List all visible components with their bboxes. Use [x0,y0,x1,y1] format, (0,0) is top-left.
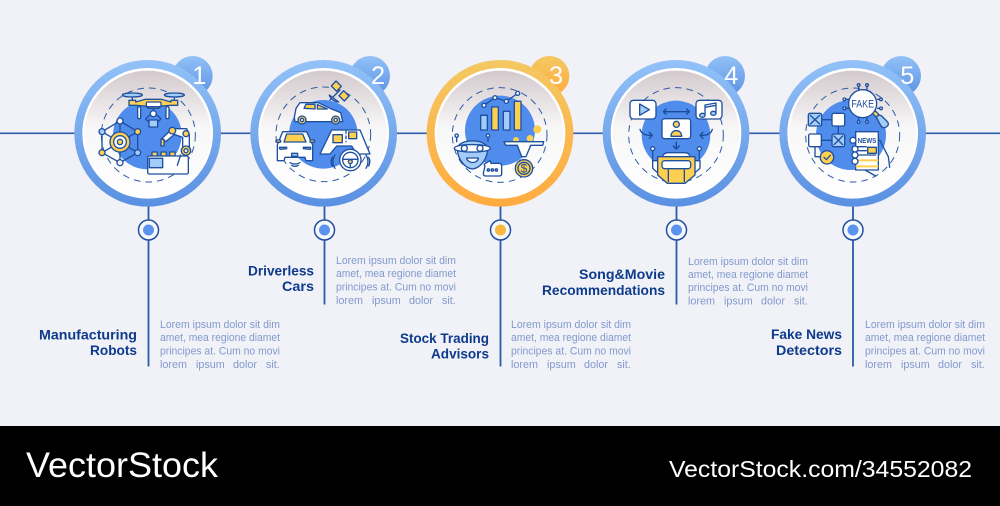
body text 1: ipsum [196,359,225,371]
heading: Fake News Detectors: Detectors [776,342,842,358]
heading: Stock Trading Advisors: Stock Trading [400,330,489,346]
body text 4: principes at. Cum no movi [688,282,808,294]
heading: Song&Movie Recommendations: Recommendations [542,282,665,298]
footer brand: VectorStock [26,446,219,485]
timeline axis [0,132,1000,134]
stem and node 5 [843,200,863,366]
body text 2: lorem [336,295,363,307]
step 4: Song & Movie Recommendations [542,56,808,307]
icon: user profile card [662,119,691,139]
heading: Manufacturing Robots: Manufacturing [39,326,137,342]
icon: music note [696,100,722,119]
body text 2: ipsum [372,295,401,307]
body text 3: ipsum [547,359,576,371]
step 2: Driverless Cars [248,56,456,307]
body text 1: Lorem ipsum dolor sit dim [160,319,280,331]
number 2: 2 [371,62,385,90]
body text 1: dolor [233,359,257,371]
heading: Fake News Detectors: Fake News [771,326,842,342]
heading: Manufacturing Robots: Robots [90,342,137,358]
icon: drone with gripper [122,93,184,127]
body text 1: principes at. Cum no movi [160,346,280,358]
body text 3: sit. [617,359,631,371]
body text 5: Lorem ipsum dolor sit dim [865,319,985,331]
step 5: Fake News Detectors [771,56,985,371]
body text 3: Lorem ipsum dolor sit dim [511,319,631,331]
icon: robot arm and conveyor [148,127,191,174]
icon: video player [630,100,656,119]
stem and node 4 [666,200,686,304]
body text 3: dolor [584,359,608,371]
body text 4: amet, mea regione diamet [688,269,808,281]
icon circle 3 [427,56,573,207]
icon: lane assist and steering wheel [320,130,370,171]
icon circle 2 [250,56,397,207]
icon: newspaper in hand [850,132,890,176]
icon: robot recommender [651,147,701,183]
body text 4: Lorem ipsum dolor sit dim [688,256,808,268]
body text 3: lorem [511,359,538,371]
number 3: 3 [549,62,563,90]
number 5: 5 [900,62,914,90]
text: FAKE: FAKE [851,99,874,111]
stem and node 1 [138,200,158,366]
footer image url: VectorStock.com/34552082 [669,456,972,482]
body text 1: amet, mea regione diamet [160,332,280,344]
text: NEWS: NEWS [858,138,877,145]
icon: bar chart with trend line [481,91,521,130]
footer bar [0,426,1000,506]
body text 2: Lorem ipsum dolor sit dim [336,255,456,267]
heading: Stock Trading Advisors: Advisors [431,346,489,362]
number 1: 1 [192,62,206,90]
icon: magnifier on FAKE [843,84,888,128]
body text 5: principes at. Cum no movi [865,346,985,358]
step 1: Manufacturing Robots [39,56,280,371]
body text 3: amet, mea regione diamet [511,332,631,344]
icon: front car [276,132,315,166]
text: dollar sign: $ [521,162,528,176]
body text 5: dolor [938,359,962,371]
body text 5: amet, mea regione diamet [865,332,985,344]
heading: Driverless Cars: Cars [282,278,314,294]
body text 4: dolor [761,296,785,308]
stem and node 2 [314,200,334,304]
body text 2: sit. [442,295,456,307]
icon: satellite [329,81,349,102]
heading: Song&Movie Recommendations: Song&Movie [579,266,665,282]
number 4: 4 [724,62,738,90]
icon: decision flowchart [808,113,845,164]
body text 2: principes at. Cum no movi [336,282,456,294]
heading: Driverless Cars: Driverless [248,262,314,278]
icon circle 5 [779,56,926,207]
icon circle 4 [603,56,749,207]
body text 2: dolor [409,295,433,307]
body text 3: principes at. Cum no movi [511,346,631,358]
icon: funnel with coins [504,125,544,177]
icon: robot advisor head [454,134,502,176]
stem and node 3 [490,200,510,366]
icon: side car [294,103,343,124]
icon: arrows [640,109,712,149]
icon: gear network [99,118,141,166]
body text 5: lorem [865,359,892,371]
step 3: Stock Trading Advisors [400,56,631,371]
body text 1: lorem [160,359,187,371]
body text 5: sit. [971,359,985,371]
icon circle 1 [74,56,221,207]
body text 4: sit. [794,296,808,308]
body text 4: ipsum [724,296,753,308]
body text 4: lorem [688,296,715,308]
body text 1: sit. [266,359,280,371]
body text 5: ipsum [901,359,930,371]
body text 2: amet, mea regione diamet [336,268,456,280]
